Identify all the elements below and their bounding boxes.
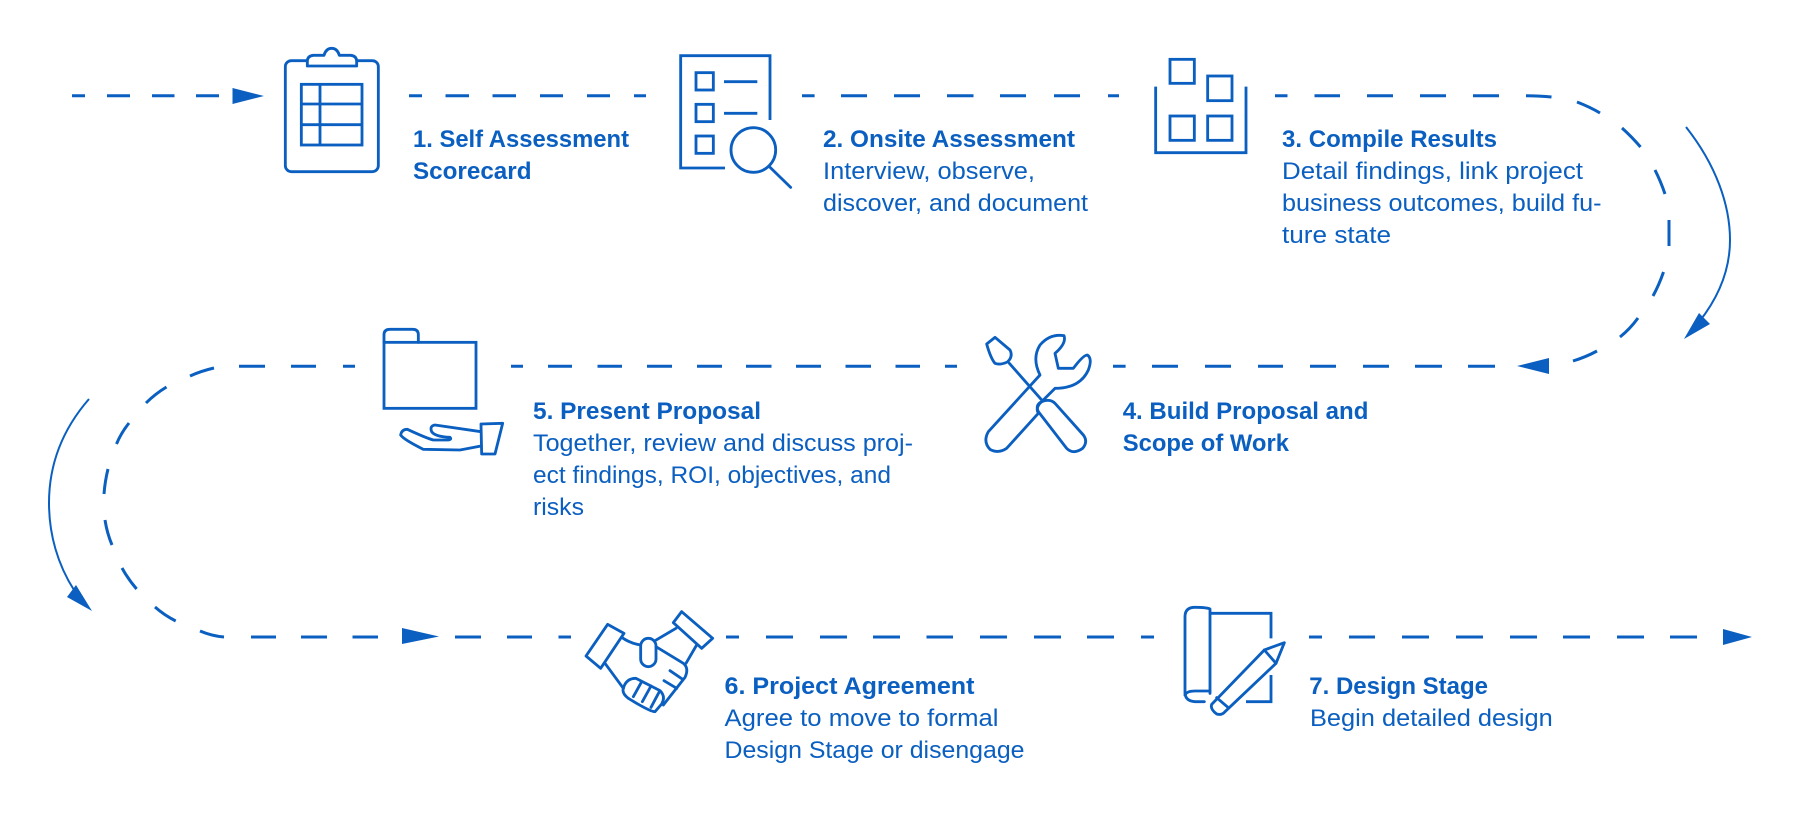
step 2 text: Interview, observe, [823, 158, 1035, 185]
dashed path: step 4 to step 5 [511, 365, 1495, 368]
step 3 text: 3. Compile Results [1282, 126, 1497, 153]
step 2 text: discover, and document [823, 190, 1088, 217]
icon: compile results tray [1156, 59, 1246, 153]
step 5 text [533, 398, 913, 521]
dashed path: step 2 to step 3 [802, 94, 1119, 97]
step 7 text: Begin detailed design [1310, 705, 1553, 732]
step 5 text: 5. Present Proposal [533, 398, 761, 425]
step 5 text: Together, review and discuss proj- [533, 430, 913, 457]
icon: blueprint scroll and pencil [1185, 607, 1284, 714]
step 2 text [823, 126, 1088, 217]
step 3 text: Detail findings, link project [1282, 158, 1583, 185]
step 5 text: ect findings, ROI, objectives, and [533, 462, 891, 489]
icon: handshake [586, 612, 713, 712]
step 6 text: Design Stage or disengage [724, 737, 1024, 764]
dashed path: step 6 to step 7 [726, 636, 1154, 638]
icon: clipboard scorecard [285, 48, 378, 172]
step 7 text: 7. Design Stage [1309, 673, 1488, 700]
dashed path: start to step 1 [72, 88, 264, 104]
dashed path: step 7 to end [1309, 629, 1752, 645]
step 1 text: 1. Self Assessment [413, 126, 629, 153]
step 6 text: 6. Project Agreement [724, 673, 974, 700]
curved arrow: right side [1684, 127, 1730, 339]
icon: folder on open hand [384, 329, 503, 454]
dashed path: step 3 curving to step 4 [1275, 96, 1669, 374]
step 4 text [1123, 398, 1368, 457]
dashed path: arrow to step 6 [455, 636, 571, 638]
step 7 text [1309, 673, 1553, 732]
dashed path: step 1 to step 2 [409, 94, 646, 97]
icon: checklist with magnifier [681, 56, 791, 187]
step 4 text: Scope of Work [1123, 430, 1289, 457]
step 6 text: Agree to move to formal [724, 705, 998, 732]
step 3 text: ture state [1282, 222, 1391, 249]
step 3 text: business outcomes, build fu- [1282, 190, 1602, 217]
step 1 text: Scorecard [413, 158, 532, 185]
step 6 text [724, 673, 1024, 764]
icon: crossed wrench and screwdriver [986, 335, 1090, 452]
step 1 text [413, 126, 629, 185]
step 2 text: 2. Onsite Assessment [823, 126, 1075, 153]
curved arrow: left side [49, 399, 92, 611]
step 3 text [1282, 126, 1602, 249]
step 5 text: risks [533, 494, 584, 521]
step 4 text: 4. Build Proposal and [1123, 398, 1368, 425]
dashed path: step 5 curving to step 6 [104, 366, 439, 644]
